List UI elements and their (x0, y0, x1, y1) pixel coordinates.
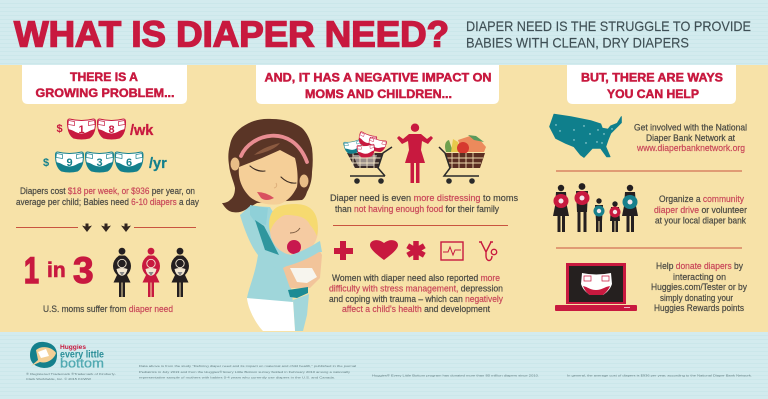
diaper drive text: Organize a community (659, 194, 745, 204)
baby eye (290, 228, 300, 233)
face (239, 150, 298, 205)
footnote: donation program: Huggies® Every Little Bottom program has donated more than 80 million diapers since 2010. (372, 374, 539, 378)
illustration: mother hugging baby (222, 119, 322, 331)
baby shoes (288, 287, 308, 298)
heading card: negative impact (256, 65, 499, 104)
donate text: Huggies.com/Tester or by (651, 282, 748, 292)
weekly cost diapers: $ (56, 123, 63, 135)
ribbed collar (250, 205, 268, 225)
diaper drive text: at your local diaper bank (655, 216, 747, 226)
headband (241, 136, 307, 162)
right ear (300, 174, 308, 188)
baby body (283, 248, 322, 288)
heading card: growing problem: THERE IS A (70, 70, 138, 84)
white trousers (247, 298, 295, 331)
far leg (293, 294, 309, 331)
icons: three mothers (113, 248, 189, 297)
icon: laptop with diaper (555, 263, 637, 311)
cardigan (240, 206, 293, 302)
weekly cost diapers (56, 119, 154, 139)
weekly cost diapers: 8 (108, 124, 115, 136)
weekly cost diapers: /wk (130, 123, 154, 139)
heading card: ways to help (567, 65, 736, 104)
logo: Huggies every little bottom: every little (60, 350, 104, 360)
stat: 1 in 3: 1 (24, 250, 39, 291)
title: WHAT IS DIAPER NEED? (14, 14, 449, 54)
fringe highlight (254, 143, 280, 155)
yearly cost diapers: 6 (126, 157, 132, 169)
heading card: negative impact: MOMS AND CHILDREN... (305, 87, 452, 101)
trademark note: Clark Worldwide, Inc. © 2015 KCWW (26, 377, 91, 381)
network text: Diaper Bank Network at (646, 133, 736, 143)
nose (274, 183, 277, 188)
cost text: Diapers cost $18 per week, or $936 per year, on (20, 186, 195, 196)
subtitle (466, 18, 751, 50)
subtitle: BABIES WITH CLEAN, DRY DIAPERS (466, 34, 689, 50)
cost text (16, 186, 200, 207)
trademark note: ® Registered Trademark ®Trademark of Kimberly- (26, 372, 116, 376)
health text: Women with diaper need also reported more (332, 273, 500, 283)
heading card: negative impact: AND, IT HAS A NEGATIVE IMPACT ON (264, 70, 492, 84)
icon: diaper cart (343, 131, 392, 184)
divider with arrows (16, 224, 196, 232)
icon: grocery cart (439, 135, 486, 184)
stat: 1 in 3: in (47, 259, 66, 282)
icon: US map (550, 114, 621, 157)
footnote: study source (139, 364, 357, 380)
weekly cost diapers: 1 (78, 124, 85, 136)
diaper drive text (654, 194, 747, 226)
donate text: interacting on (673, 272, 726, 282)
donate text: Help donate diapers by (656, 261, 744, 271)
heading card: ways to help: YOU CAN HELP (607, 87, 699, 101)
network text: www.diaperbanknetwork.org (636, 143, 745, 153)
logo: Huggies every little bottom: bottom (60, 356, 104, 370)
health text (329, 273, 504, 314)
panel: growing problem (16, 65, 200, 314)
header band (0, 0, 768, 65)
donate text (651, 261, 748, 313)
closed eyes (250, 166, 296, 183)
icon: monitor (441, 242, 463, 260)
lips (257, 192, 274, 200)
health text: and coping with trauma – which can negatively (329, 294, 504, 304)
footnote: study source: representative sample of mothers with babies 0-4 years who currently use diapers in the U.S. and Canada. (139, 376, 335, 380)
distress text: Diaper need is even more distressing to moms (330, 193, 519, 203)
health text: difficulty with stress management, depression (329, 284, 503, 294)
logo: Huggies every little bottom (30, 342, 104, 370)
network text: Get involved with the National (634, 122, 747, 132)
yearly cost diapers: 9 (66, 157, 73, 169)
panel: negative impact (256, 65, 519, 314)
yearly cost diapers: /yr (149, 156, 167, 172)
heading card: growing problem (22, 65, 187, 104)
baby diaper (290, 268, 317, 283)
heading card: ways to help: BUT, THERE ARE WAYS (581, 70, 723, 84)
left ear (230, 158, 240, 170)
baby head (270, 205, 318, 255)
icon: heart (370, 240, 398, 260)
icon: family (553, 183, 638, 232)
icon: stethoscope (479, 242, 497, 260)
footnote: study source: Data above is from the study "Defining diaper need and its impact on maternal and child health," published in the journal (139, 364, 357, 368)
distress text (330, 193, 519, 214)
yearly cost diapers: $ (43, 157, 49, 169)
icon: worried mother (397, 124, 433, 183)
stat: 1 in 3: 3 (73, 250, 94, 291)
logo: Huggies every little bottom: Huggies (60, 344, 86, 351)
distress text: than not having enough food for their family (335, 204, 500, 214)
pacifier (287, 240, 301, 254)
icon: asterisk (408, 241, 424, 260)
footnote: study source: Pediatrics in July 2013 and from the Huggies® Every Little Bottom survey fielded in February 2010 among a nationally (139, 370, 351, 374)
cost text: average per child; Babies need 6-10 diapers a day (16, 197, 200, 207)
baby hair (269, 204, 318, 236)
inner top (255, 220, 279, 255)
hair (222, 119, 313, 212)
donate text: simply donating your (660, 293, 733, 303)
yearly cost diapers (43, 152, 167, 172)
footer band (0, 332, 768, 399)
icon: cross (334, 241, 353, 260)
trademark note (26, 372, 116, 381)
footnote: average cost: In general, the average cost of diapers is $936 per year, according to the National Diaper Bank Network. (567, 374, 752, 378)
donate text: Huggies Rewards points (654, 303, 745, 313)
stat: 1 in 3 (24, 250, 94, 291)
panel: ways to help (550, 65, 748, 313)
hugging arm (240, 212, 322, 268)
health text: affect a child's health and development (342, 304, 491, 314)
yearly cost diapers: 3 (96, 157, 103, 169)
moms text: U.S. moms suffer from diaper need (43, 304, 173, 314)
heading card: growing problem: GROWING PROBLEM... (36, 86, 174, 100)
diaper drive text: diaper drive or volunteer (654, 205, 747, 215)
network text (634, 122, 747, 153)
